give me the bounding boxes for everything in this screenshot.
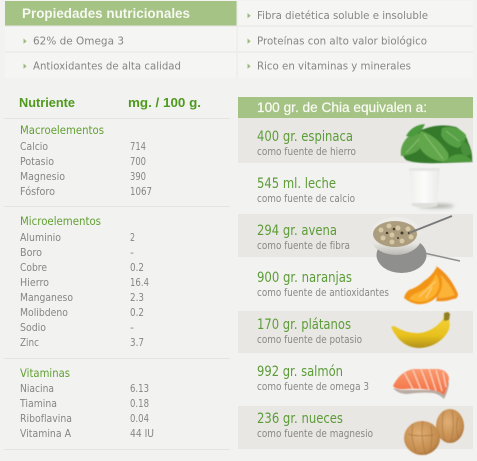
equivalents heading [238,97,473,118]
section: vitaminas: 44 IU [130,427,154,440]
section: microelementos: 16.4 [130,276,149,289]
section: microelementos: 2 [130,231,135,244]
section: microelementos: 0.2 [130,261,144,274]
row: espinaca: como fuente de hierro [257,145,356,158]
row: naranjas: como fuente de antioxidantes [257,286,389,299]
section: macroelementos: Potasio [20,155,54,168]
section: vitaminas: Niacina [20,382,54,395]
row: nueces: 236 gr. nueces [257,411,343,427]
section: microelementos: - [130,246,134,259]
icon: glass of milk [409,168,454,208]
row: nueces: como fuente de magnesio [257,427,373,440]
rows background [5,1,473,78]
section: microelementos: Zinc [20,336,39,349]
section: vitaminas: 6.13 [130,382,149,395]
section: microelementos [20,214,149,349]
section: macroelementos: Magnesio [20,170,65,183]
property: antioxidants: Antioxidantes de alta calidad [33,60,181,72]
icon: salmon [393,369,449,399]
row: avena: 294 gr. avena [257,223,337,239]
icon: spinach [401,124,473,163]
property: fibre: Fibra dietética soluble e insoluble [257,9,428,22]
heading: Propiedades nutricionales: Propiedades nutricionales [22,6,190,21]
section: microelementos: 2.3 [130,291,144,304]
row: naranjas [257,266,458,304]
row: plátanos: como fuente de potasio [257,333,362,346]
section: vitaminas: 0.18 [130,397,149,410]
equivalents heading: 100 gr. de Chia equivalen a: [257,99,427,115]
section: microelementos: 3.7 [130,336,144,349]
section: vitaminas: Vitaminas [20,366,70,380]
row: leche: como fuente de calcio [257,192,355,205]
section: macroelementos: 390 [130,170,146,183]
section: microelementos: Manganeso [20,291,73,304]
table header [19,95,201,110]
row: naranjas: 900 gr. naranjas [257,270,352,286]
section: macroelementos: Macroelementos [20,123,104,137]
row: avena: como fuente de fibra [257,239,350,252]
section: macroelementos: Calcio [20,140,48,153]
row: leche: 545 ml. leche [257,176,336,192]
section: microelementos: Aluminio [20,231,61,244]
row: espinaca: 400 gr. espinaca [257,129,353,145]
row: salmón [257,364,449,399]
section: vitaminas [19,366,154,440]
property: omega 3: 62% de Omega 3 [33,34,124,48]
section: vitaminas: Riboflavina [20,412,72,425]
section: microelementos: 0.2 [130,306,144,319]
section: macroelementos: 714 [130,140,146,153]
section: vitaminas: Vitamina A [20,427,71,440]
row: nueces [238,406,473,455]
section: vitaminas: 0.04 [130,412,149,425]
section: microelementos: Microelementos [20,214,101,228]
section: microelementos: Boro [20,246,42,259]
row: plátanos: 170 gr. plátanos [257,317,351,333]
icon: bowl of oats [370,216,460,273]
row: leche [257,168,454,208]
table header: mg. / 100 g. [128,95,201,110]
icon: banana [391,312,450,348]
section: macroelementos: 700 [130,155,146,168]
row: plátanos [238,311,473,353]
panel: nutritional properties [5,1,473,78]
row: espinaca [238,118,473,163]
property: vitamins and minerals: Rico en vitaminas y minerales [257,60,411,72]
table header: Nutriente [19,95,75,110]
section: macroelementos: Fósforo [20,185,55,198]
panel: chia equivalents [238,97,473,455]
section: macroelementos: 1067 [130,185,152,198]
heading: Propiedades nutricionales [5,1,237,26]
section: microelementos: Hierro [20,276,49,289]
icon: walnuts [404,409,464,455]
section: vitaminas: Tiamina [19,397,57,410]
row: avena [238,214,473,273]
row: salmón: 992 gr. salmón [257,364,343,380]
section: microelementos: Cobre [20,261,47,274]
section: microelementos: - [130,321,134,334]
row: salmón: como fuente de omega 3 [257,380,369,393]
property: proteins: Proteínas con alto valor biológico [257,34,427,48]
icon: orange slices [404,266,458,304]
section: microelementos: Molibdeno [20,306,68,319]
panel: nutrient table [4,95,230,450]
section: macroelementos [20,123,152,198]
section: microelementos: Sodio [20,321,46,334]
